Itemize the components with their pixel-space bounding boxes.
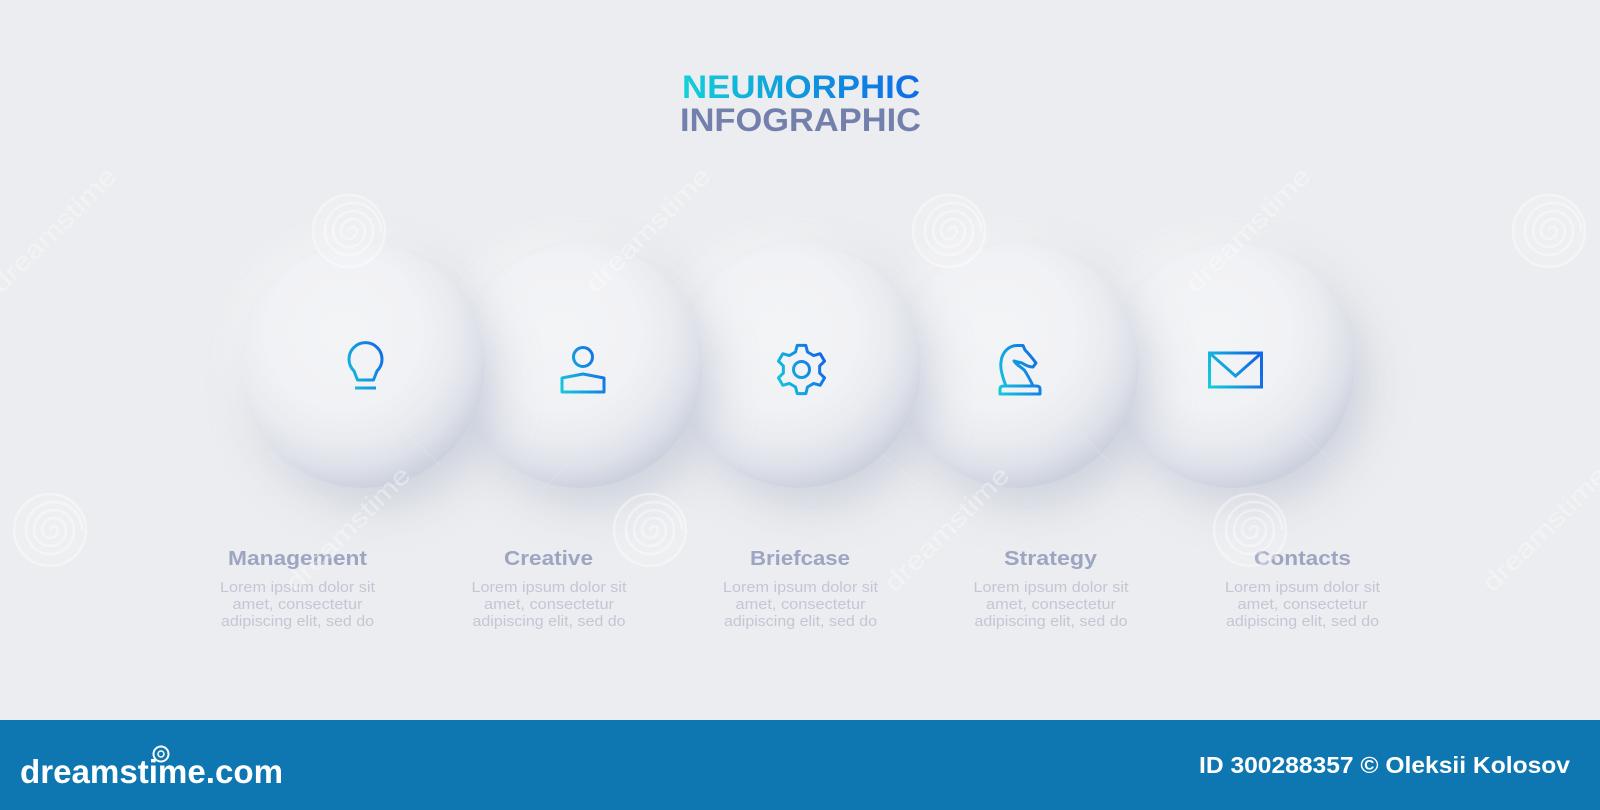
text block: Strategy: amet, consectetur — [986, 597, 1116, 613]
text block: Contacts — [1225, 548, 1380, 630]
icon: chess knight — [1000, 346, 1040, 394]
text block: Management: Management — [228, 548, 367, 570]
text block: Strategy — [974, 548, 1128, 630]
icon: person — [562, 348, 604, 392]
text block: Contacts: amet, consectetur — [1238, 597, 1368, 613]
circle 4 — [895, 244, 1139, 488]
icon: light bulb — [349, 343, 382, 388]
watermark text — [0, 161, 1600, 598]
title: NEUMORPHIC — [682, 69, 920, 105]
text block: Management: amet, consectetur — [232, 597, 363, 613]
watermark text: dreamstime — [579, 161, 717, 299]
text block: Management — [220, 548, 375, 630]
text block: Management: Lorem ipsum dolor sit — [220, 580, 375, 596]
text block: Briefcase — [723, 548, 878, 630]
text block: Contacts: Contacts — [1254, 548, 1351, 570]
circle 3 — [677, 244, 921, 488]
circle 1 — [241, 244, 485, 488]
text block: Creative — [472, 548, 626, 630]
title: INFOGRAPHIC — [680, 102, 921, 138]
footer bar — [0, 720, 1600, 810]
text block: Briefcase: Lorem ipsum dolor sit — [723, 580, 878, 596]
text block: Briefcase: Briefcase — [750, 548, 850, 570]
watermark text: dreamstime — [878, 460, 1016, 598]
text block: Strategy: Lorem ipsum dolor sit — [974, 580, 1128, 596]
icon: gear — [778, 345, 825, 394]
text block: Creative: Creative — [504, 548, 593, 570]
circle 2 — [459, 244, 703, 488]
text block: Strategy: adipiscing elit, sed do — [974, 614, 1128, 630]
text block: Creative: amet, consectetur — [484, 597, 614, 613]
text block: Briefcase: adipiscing elit, sed do — [724, 614, 877, 630]
text block: Contacts: adipiscing elit, sed do — [1226, 614, 1379, 630]
footer logo text: dreamstime.com — [20, 753, 283, 790]
text block: Briefcase: amet, consectetur — [736, 597, 866, 613]
text block: Creative: adipiscing elit, sed do — [472, 614, 626, 630]
text block: Management: adipiscing elit, sed do — [221, 614, 374, 630]
watermark text: dreamstime — [1179, 161, 1317, 299]
circle 5 — [1111, 244, 1355, 488]
text block: Strategy: Strategy — [1004, 548, 1098, 570]
watermark text: dreamstime — [1476, 460, 1600, 598]
watermark spirals — [14, 195, 1585, 566]
title — [680, 69, 921, 138]
footer credit: ID 300288357 © Oleksii Kolosov — [1199, 752, 1570, 778]
icon: envelope — [1210, 353, 1262, 387]
text block: Contacts: Lorem ipsum dolor sit — [1225, 580, 1380, 596]
watermark text: dreamstime — [279, 460, 417, 598]
text block: Creative: Lorem ipsum dolor sit — [472, 580, 626, 596]
